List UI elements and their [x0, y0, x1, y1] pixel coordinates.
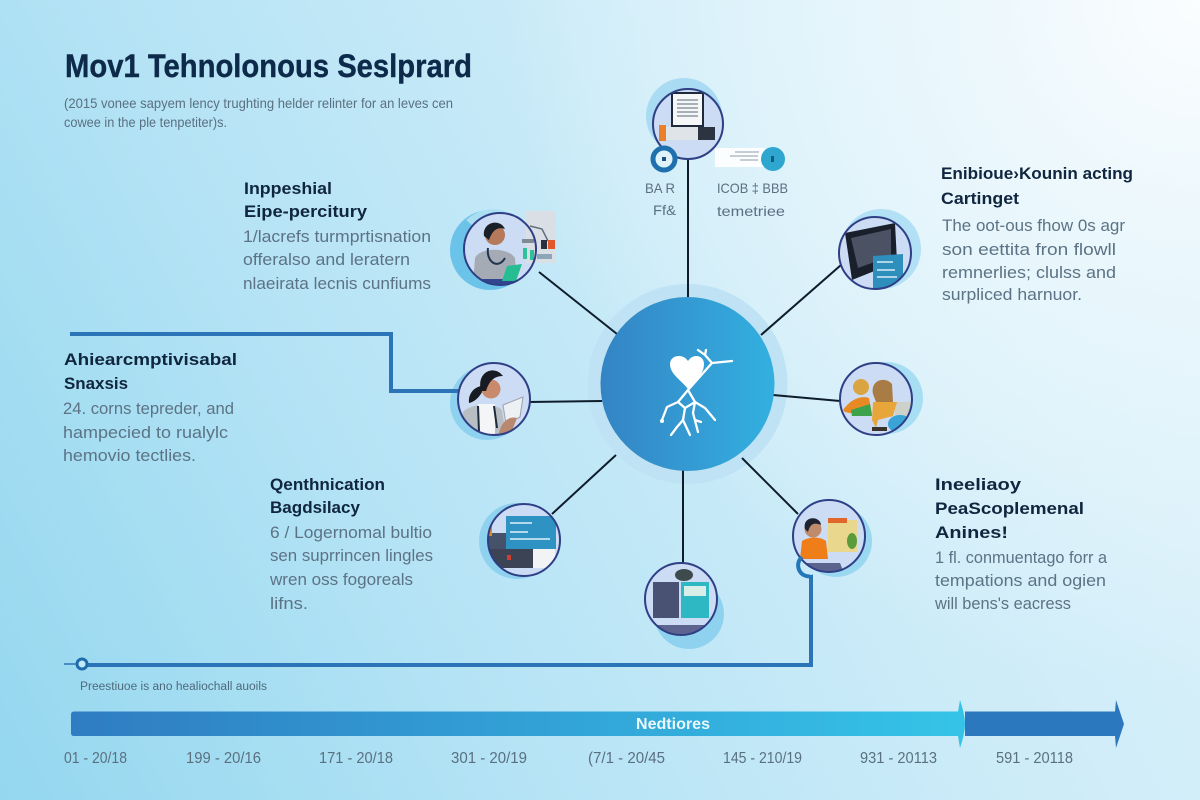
timeline dates: 591 - 20118 — [996, 750, 1073, 767]
text block: Enibioue: Cartinget — [941, 189, 1019, 208]
node: presenter with board (lower right) — [793, 500, 872, 577]
text block: Qenthnication: wren oss fogoreals — [269, 570, 413, 589]
connector lines — [528, 155, 841, 564]
timeline dates: 931 - 20113 — [860, 750, 937, 767]
text block: Enibioue — [941, 164, 1133, 304]
upper blue connector — [70, 334, 458, 391]
timeline dates: 171 - 20/18 — [319, 750, 393, 767]
label: BA R: BA R — [645, 180, 675, 196]
text block: Ahiearcmptivisabal: hemovio tectlies. — [63, 446, 196, 465]
label: ICOB: ICOB ‡ BBB — [717, 180, 788, 196]
text block: Qenthnication: Bagdsilacy — [270, 498, 361, 517]
node: doctor with report (upper left) — [450, 209, 556, 290]
text block: Enibioue: Enibioue›Kounin acting — [941, 164, 1133, 183]
node: document terminal (top) — [646, 78, 723, 159]
label: ICOB — [717, 180, 788, 219]
intro text: cowee in the ple tenpetiter)s. — [64, 114, 227, 130]
text block: Inneliaoy: Ineeliaoy — [935, 475, 1022, 494]
text block: Inneliaoy: Anines! — [935, 523, 1008, 542]
text block: Inneliaoy — [934, 475, 1108, 613]
label: BA R — [645, 180, 677, 218]
text block: Enibioue: surpliced harnuor. — [942, 285, 1082, 304]
text block: Enibioue: son eettita fron flowll — [942, 240, 1116, 259]
text block: Inppeshial: nlaeirata lecnis cunfiums — [243, 274, 431, 293]
green clipboard — [502, 264, 522, 281]
text block: Ahiearcmptivisabal: 24. corns tepreder, and — [63, 399, 234, 418]
badge: ring icon — [653, 148, 675, 170]
text block: Ahiearcmptivisabal: Ahiearcmptivisabal — [64, 350, 237, 369]
text block: Inppeshial: offeralso and leratern — [243, 250, 410, 269]
node: tablet with document (upper right) — [839, 209, 921, 289]
text block: Inneliaoy: PeaScoplemenal — [935, 499, 1084, 518]
timeline caption: Preestiuoe is ano healiochall auoils — [80, 681, 267, 693]
text block: Inneliaoy: will bens's eacress — [934, 594, 1071, 613]
label: ICOB: temetriee — [717, 203, 785, 219]
text block: Qenthnication: sen suprrincen lingles — [270, 546, 433, 565]
text block: Inneliaoy: tempations and ogien — [935, 571, 1106, 590]
ring joint on lower connector — [798, 557, 814, 576]
timeline dates: 01 - 20/18 — [64, 750, 127, 767]
text block: Qenthnication — [269, 475, 433, 613]
text block: Qenthnication: 6 / Logernomal bultio — [270, 523, 432, 542]
report sheet — [522, 211, 556, 263]
node: two people (right) — [840, 362, 923, 435]
text block: Ahiearcmptivisabal — [63, 350, 237, 465]
text block: Enibioue: remnerlies; clulss and — [942, 263, 1116, 282]
text block: Ahiearcmptivisabal: hampecied to rualylc — [63, 423, 229, 442]
intro text — [64, 95, 453, 130]
text block: Inppeshial: Eipe-percitury — [244, 202, 368, 221]
title: Mov1 Tehnolonous Seslprard — [65, 48, 472, 84]
badge: card with teal dot — [715, 147, 785, 171]
node: dark and teal panels (bottom) — [644, 563, 724, 649]
timeline dates: 199 - 20/16 — [186, 750, 261, 767]
timeline arrow bar — [71, 700, 1124, 748]
text block: Enibioue: The oot-ous fhow 0s agr — [942, 216, 1125, 235]
text block: Qenthnication: lifns. — [270, 594, 308, 613]
text block: Ahiearcmptivisabal: Snaxsis — [64, 374, 128, 393]
timeline dates: 301 - 20/19 — [451, 750, 527, 767]
node: doctor with tablet (left) — [450, 363, 530, 440]
hub halo — [588, 284, 788, 484]
bar label: Nedtiores — [636, 716, 710, 733]
text block: Inppeshial: Inppeshial — [244, 179, 332, 198]
central hub — [600, 297, 774, 471]
text block: Inppeshial: 1/lacrefs turmprtisnation — [243, 227, 431, 246]
lower blue connector — [64, 572, 811, 669]
label: BA R: Ff& — [653, 202, 677, 218]
icon: heart with branching roots — [660, 350, 732, 435]
text block: Inneliaoy: 1 fl. conmuentago forr a — [935, 548, 1108, 567]
text block: Inppeshial — [243, 179, 431, 293]
timeline dates — [64, 750, 1073, 767]
intro text: (2015 vonee sapyem lency trughting helder relinter for an leves cen — [64, 95, 453, 111]
timeline dates: 145 - 210/19 — [723, 750, 802, 767]
node: blue info screen (lower left) — [479, 503, 560, 579]
text block: Qenthnication: Qenthnication — [270, 475, 385, 494]
timeline dates: (7/1 - 20/45 — [588, 750, 665, 767]
